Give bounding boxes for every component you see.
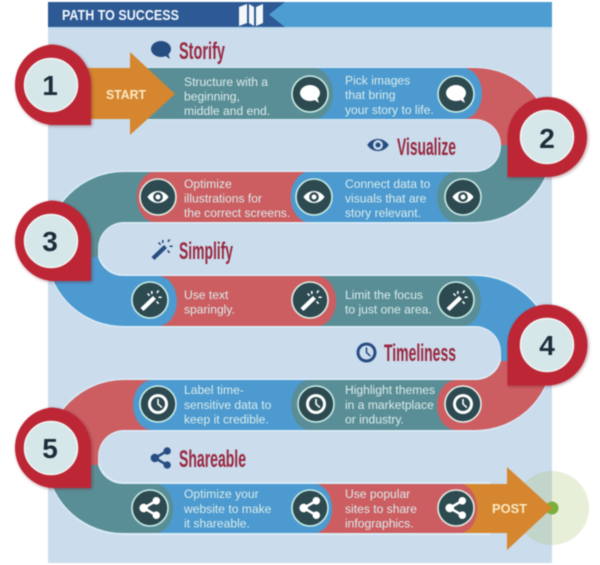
heading: storify: Storify — [179, 38, 225, 65]
row 5 segments — [47, 465, 500, 533]
icon: eye — [367, 139, 389, 151]
icon: map — [239, 4, 263, 26]
text: optimize illustrations: illustrations for — [184, 192, 262, 206]
icon: clock 3 — [445, 386, 481, 422]
text: use popular sites: infographics. — [345, 516, 414, 530]
icon: eye 1 — [140, 179, 176, 215]
text: label time-sensitive: Label time- — [184, 383, 244, 397]
icon: clock 2 — [298, 386, 334, 422]
heading: shareable: Shareable — [179, 446, 246, 473]
pin: 3: 3 — [42, 226, 58, 257]
pin: 1: 1 — [42, 70, 58, 101]
text: optimize illustrations: Optimize — [184, 177, 232, 191]
row 4 segments — [47, 361, 552, 465]
icon: eye 2 — [296, 179, 332, 215]
text: structure: beginning, — [184, 90, 240, 104]
snake path — [47, 68, 552, 533]
text: use popular sites: Use popular — [345, 487, 410, 501]
section: timeliness heading — [356, 340, 456, 367]
pin: 1 — [15, 44, 91, 125]
text: connect data: Connect data to — [345, 177, 431, 191]
text: limit the focus: to just one area. — [345, 302, 432, 316]
text: optimize website: Optimize your — [184, 487, 259, 501]
text: highlight themes: in a marketplace — [345, 398, 434, 412]
section: shareable heading — [151, 446, 246, 473]
section: simplify heading — [152, 238, 233, 265]
icon: speech bubble 1 — [292, 76, 328, 112]
pin: 3 — [15, 200, 91, 281]
icon: wand 1 — [132, 282, 168, 318]
panel: background — [48, 28, 552, 563]
section: storify heading — [151, 38, 225, 65]
row 3 segments — [47, 257, 552, 361]
pin: 4 — [507, 304, 588, 386]
heading: visualize: Visualize — [397, 134, 456, 161]
arrow: post — [462, 467, 589, 550]
icon: wand 2 — [292, 282, 328, 318]
text: label time-sensitive: sensitive data to — [184, 398, 272, 412]
text: pick images: Pick images — [345, 74, 410, 88]
arrow: start: START — [106, 87, 146, 102]
arrow: start — [85, 52, 175, 135]
icon: wand 3 — [438, 282, 474, 318]
arrow: post: POST — [492, 501, 527, 516]
icon: eye 3 — [445, 179, 481, 215]
row 1 segments — [130, 68, 552, 153]
text: highlight themes: or industry. — [345, 412, 404, 426]
icon: wand — [152, 239, 173, 260]
pin: 4: 4 — [539, 330, 555, 361]
text: optimize website: website to make — [183, 502, 272, 516]
text: optimize website: it shareable. — [184, 516, 250, 530]
section: visualize heading — [367, 134, 456, 161]
pin: 2 — [507, 97, 587, 177]
text: connect data: visuals that are — [345, 192, 427, 206]
text: highlight themes: Highlight themes — [345, 383, 435, 397]
pin: 5 — [15, 408, 91, 488]
pin: 2: 2 — [539, 123, 555, 154]
text: structure: middle and end. — [184, 104, 270, 118]
text: use text: Use text — [184, 288, 229, 302]
text: use popular sites: sites to share — [345, 502, 417, 516]
text: connect data: story relevant. — [345, 206, 421, 220]
text: structure: Structure with a — [184, 75, 268, 89]
icon: share 2 — [292, 490, 328, 526]
text: pick images: your story to life. — [345, 103, 434, 117]
text: optimize illustrations: the correct screens. — [184, 206, 290, 220]
icon: speech bubble 2 — [438, 76, 474, 112]
heading: timeliness: Timeliness — [384, 340, 456, 367]
header banner — [48, 2, 552, 29]
icon: clock — [356, 342, 376, 362]
icon: speech bubble — [151, 41, 171, 59]
heading: path to success: PATH TO SUCCESS — [62, 7, 179, 24]
icon: share 3 — [438, 490, 474, 526]
text: use text: sparingly. — [184, 302, 235, 316]
text: pick images: that bring — [345, 88, 395, 102]
row 2 segments — [47, 145, 552, 257]
pin: 5: 5 — [42, 433, 58, 464]
icon: share — [151, 447, 171, 469]
icon: share 1 — [132, 490, 168, 526]
heading: simplify: Simplify — [179, 238, 233, 265]
icon: clock 1 — [140, 386, 176, 422]
text: label time-sensitive: keep it credible. — [184, 412, 269, 426]
text: limit the focus: Limit the focus — [345, 288, 423, 302]
